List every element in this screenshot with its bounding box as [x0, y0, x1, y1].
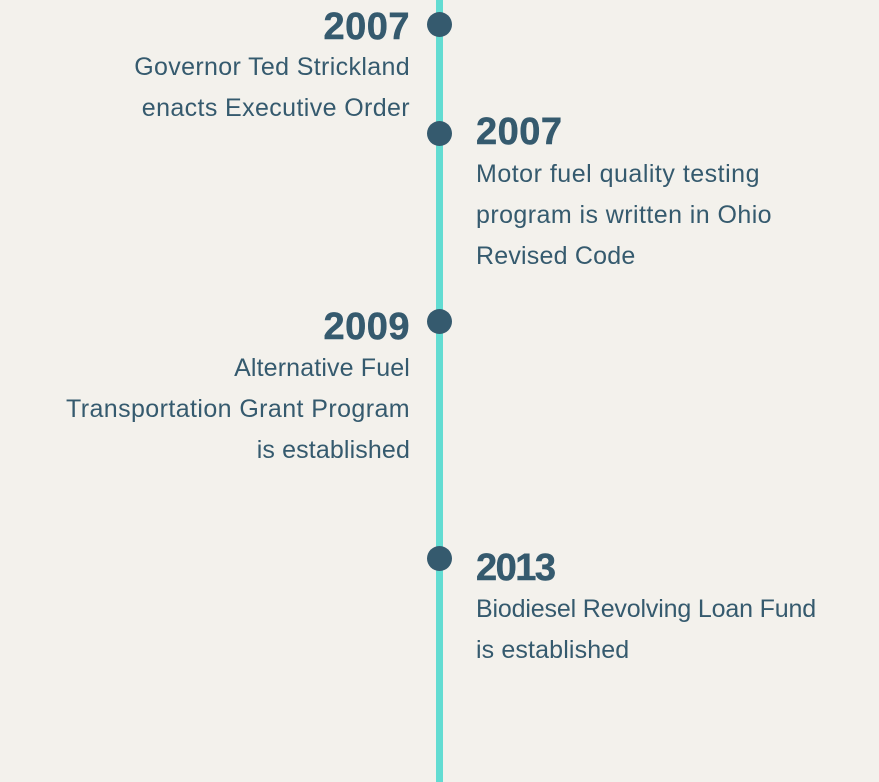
description: Revised Code: [476, 242, 635, 270]
event: 2007 executive order: [134, 6, 410, 122]
description: [476, 160, 772, 270]
description: Biodiesel Revolving Loan Fund: [476, 595, 816, 623]
description: [66, 354, 410, 464]
dot: 2009: [427, 309, 452, 334]
description: is established: [257, 436, 410, 464]
dot: 2007 executive order: [427, 12, 452, 37]
description: is established: [476, 636, 629, 664]
description: [476, 595, 816, 664]
year: 2013: [476, 547, 555, 589]
event: 2013: [476, 547, 816, 664]
dot: 2007 fuel testing: [427, 121, 452, 146]
description: Governor Ted Strickland: [134, 53, 410, 81]
description: Transportation Grant Program: [66, 395, 410, 423]
timeline line: [436, 0, 443, 782]
description: program is written in Ohio: [476, 201, 772, 229]
year: 2007: [323, 6, 410, 48]
description: Alternative Fuel: [234, 354, 410, 382]
dot: 2013: [427, 546, 452, 571]
description: enacts Executive Order: [142, 94, 410, 122]
description: Motor fuel quality testing: [476, 160, 760, 188]
year: 2007: [476, 111, 563, 153]
event: 2009: [66, 306, 410, 464]
year: 2009: [323, 306, 410, 348]
description: [134, 53, 410, 122]
event: 2007 fuel testing: [476, 111, 772, 270]
